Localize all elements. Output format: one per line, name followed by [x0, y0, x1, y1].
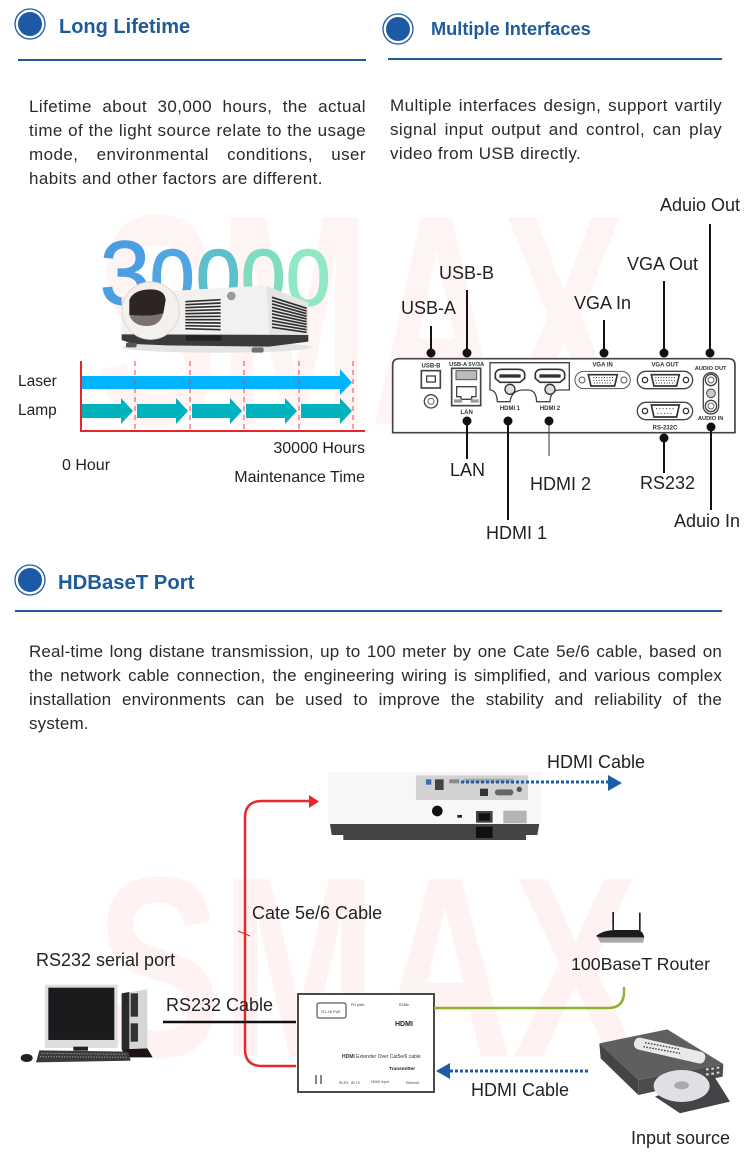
- callout: VGA Out: [627, 254, 698, 358]
- graphic: 30000 lifetime numerals: 0: [286, 233, 330, 322]
- callout: USB-B: [439, 263, 494, 358]
- illustration: desktop computer: [21, 985, 153, 1062]
- watermark: top: SMAX: [96, 152, 625, 488]
- arrow: laser continuous: [82, 369, 352, 395]
- callout: LAN: LAN: [450, 460, 485, 480]
- callout: USB-B: USB-B: [439, 263, 494, 283]
- diagram: HDMI extender transmitter box: [298, 994, 434, 1092]
- heading: Long Lifetime: [15, 9, 366, 60]
- callout: HDMI 2: HDMI 2: [530, 474, 591, 494]
- label: RS232 Cable: RS232 Cable: [166, 995, 273, 1015]
- callout: Aduio In: [674, 422, 740, 531]
- diagram: HDMI extender transmitter box: RJ-45 PoE: [321, 1009, 341, 1014]
- diagram: projector rear port panel: [393, 359, 735, 433]
- heading: Multiple Interfaces: Multiple Interfaces: [431, 19, 591, 39]
- callout: USB-A: USB-A: [401, 298, 456, 318]
- diagram: projector rear port panel: VGA IN: [592, 363, 613, 369]
- text block: HDBaseT description: system.: [29, 714, 89, 733]
- callout: Aduio Out: [660, 195, 740, 358]
- line: RS232 cable: [163, 1021, 296, 1023]
- chart: laser vs lamp maintenance timeline: Laser: [18, 373, 57, 390]
- text block: HDBaseT description: [29, 642, 722, 733]
- chart: laser vs lamp maintenance timeline: 30000 Hours: [273, 440, 365, 457]
- callout: HDMI 1: HDMI 1: [486, 523, 547, 543]
- callout: VGA Out: VGA Out: [627, 254, 698, 274]
- illustration: router: [596, 912, 644, 943]
- diagram: HDMI extender transmitter box: HDMI Input: [371, 1080, 389, 1084]
- label: Input source: Input source: [631, 1128, 730, 1148]
- callout: HDMI 2: [530, 416, 591, 494]
- callout: RS232: RS232: [640, 473, 695, 493]
- heading: HDBaseT Port: [15, 565, 722, 611]
- callout: VGA In: [574, 293, 631, 358]
- callout: HDMI 1: [486, 416, 547, 543]
- diagram: HDMI extender transmitter box: IR-RX: [339, 1081, 349, 1085]
- text block: lifetime description: [29, 97, 366, 188]
- illustration: laser projector front view: [122, 282, 312, 353]
- graphic: 30000 lifetime numerals: [100, 224, 330, 324]
- diagram: HDMI extender transmitter box: IR-TX: [351, 1081, 361, 1085]
- text block: lifetime description: time of the light source relate to the usage: [29, 121, 366, 140]
- callout: LAN: [450, 416, 485, 480]
- text block: lifetime description: habits and other factors are different.: [29, 169, 323, 188]
- diagram: HDMI extender transmitter box: HDMI Extender Over Cat5e/6 cable: [342, 1054, 421, 1060]
- label: RS232 serial port: RS232 serial port: [36, 950, 175, 970]
- diagram: HDMI extender transmitter box: Ethernet: [406, 1081, 419, 1085]
- arrow: HDMI input dotted: [436, 1063, 590, 1079]
- watermark: bottom: SMAX: [96, 823, 638, 1111]
- diagram: HDMI extender transmitter box: Transmitter: [389, 1066, 415, 1072]
- heading: HDBaseT Port: HDBaseT Port: [58, 572, 195, 594]
- diagram: projector rear port panel: HDMI 1: [500, 406, 521, 412]
- heading: Multiple Interfaces: [383, 14, 722, 59]
- diagram: projector rear port panel: HDMI 2: [540, 406, 561, 412]
- diagram: HDMI extender transmitter box: HDMI: [395, 1021, 413, 1028]
- diagram: projector rear port panel: AUDIO IN: [698, 416, 723, 422]
- illustration: projector rear view: [328, 772, 542, 840]
- text block: lifetime description: Lifetime about 30,000 hours, the actual: [29, 97, 366, 116]
- graphic: 30000 lifetime numerals: 3: [100, 224, 150, 324]
- graphic: 30000 lifetime numerals: 0: [241, 233, 286, 322]
- illustration: DVD player input source: [599, 1029, 730, 1113]
- text block: interfaces description: video from USB directly.: [390, 144, 581, 163]
- text block: interfaces description: Multiple interfaces design, support vartily: [390, 96, 722, 115]
- port: USB-B: [421, 371, 440, 408]
- port: RS-232C: [637, 402, 693, 420]
- label: 100BaseT Router: 100BaseT Router: [571, 954, 710, 974]
- heading: Long Lifetime: Long Lifetime: [59, 16, 190, 38]
- diagram: projector rear port panel: AUDIO OUT: [695, 366, 727, 372]
- callout: USB-A: [401, 298, 456, 358]
- text block: interfaces description: signal input output and control, can play: [390, 120, 722, 139]
- text block: HDBaseT description: Real-time long distane transmission, up to 100 meter by one Cate 5e/6 cable, based on: [29, 642, 722, 661]
- chart: laser vs lamp maintenance timeline: [18, 361, 365, 486]
- callout: RS232: [640, 434, 695, 493]
- chart: laser vs lamp maintenance timeline: Maintenance Time: [234, 469, 365, 486]
- diagram: projector rear port panel: VGA OUT: [651, 363, 679, 369]
- chart: laser vs lamp maintenance timeline: 0 Hour: [62, 457, 111, 474]
- diagram: projector rear port panel: RS-232C: [653, 425, 678, 431]
- callout: Aduio Out: Aduio Out: [660, 195, 740, 215]
- port: VGA Out: [637, 371, 693, 389]
- arrows: lamp replacement intervals: [82, 398, 352, 424]
- graphic: 30000 lifetime numerals: 0: [150, 233, 194, 322]
- text block: HDBaseT description: the network cable connection, the engineering wiring is simplified, and various complex: [29, 666, 722, 685]
- diagram: HDMI extender transmitter box: RJ45e: [399, 1003, 409, 1007]
- label: HDMI Cable input: HDMI Cable: [471, 1080, 569, 1100]
- diagram: projector rear port panel: USB-B: [422, 363, 441, 369]
- port: USB-A and LAN: [452, 368, 481, 406]
- chart: laser vs lamp maintenance timeline: Lamp: [18, 402, 57, 419]
- text block: lifetime description: mode, environmental conditions, user: [29, 145, 366, 164]
- diagram: projector rear port panel: LAN: [461, 410, 473, 416]
- port: audio jacks: [703, 373, 719, 414]
- line: Ethernet cable green: [434, 987, 624, 1008]
- graphic: 30000 lifetime numerals: 0: [196, 233, 240, 322]
- label: Cate 5e/6 Cable: Cate 5e/6 Cable: [252, 903, 382, 923]
- port: HDMI bracket: [490, 363, 569, 402]
- text block: HDBaseT description: installation environments can be used to improve the stability and reliability of the: [29, 690, 722, 709]
- diagram: projector rear port panel: USB-A 5V/3A: [449, 362, 484, 368]
- label: HDMI Cable output: HDMI Cable: [547, 752, 645, 772]
- arrow: HDMI output dotted: [461, 775, 622, 791]
- callout: Aduio In: Aduio In: [674, 511, 740, 531]
- port: VGA In: [575, 371, 630, 389]
- text block: interfaces description: [390, 96, 722, 163]
- diagram: HDMI extender transmitter box: PG pitch: [351, 1003, 364, 1007]
- callout lines and labels for ports: [401, 195, 740, 543]
- arrow: Cate 5e/6 cable red: [238, 795, 319, 1066]
- callout: VGA In: VGA In: [574, 293, 631, 313]
